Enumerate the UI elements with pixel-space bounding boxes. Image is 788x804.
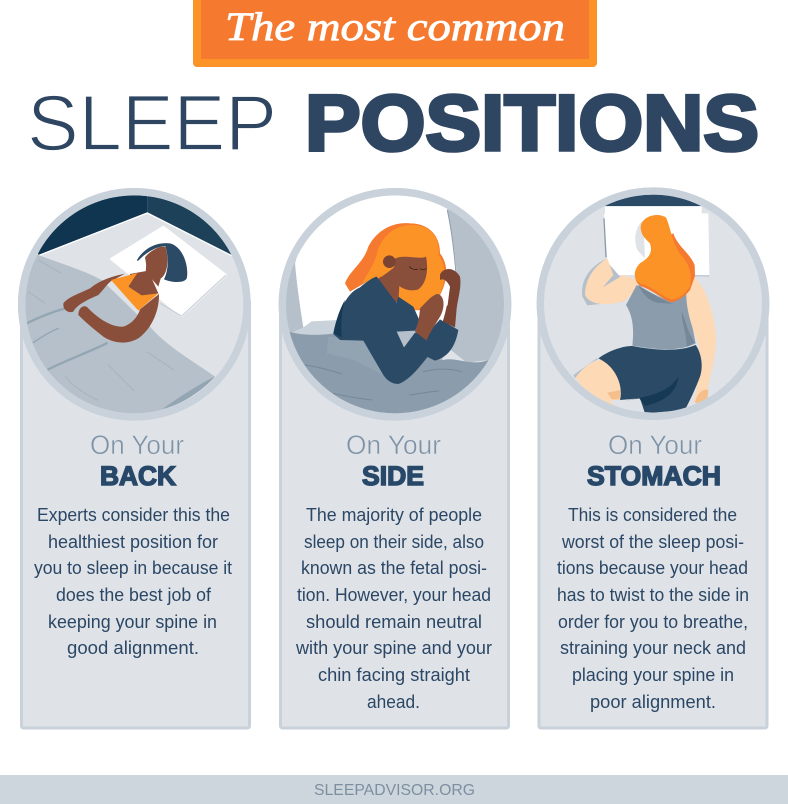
heading: BACK xyxy=(100,461,176,491)
heading: On Your xyxy=(608,430,702,460)
near arm xyxy=(585,258,637,304)
description: order for you to breathe, xyxy=(558,612,748,632)
tank top xyxy=(626,285,696,349)
banner text: The most common xyxy=(225,4,565,49)
shorts xyxy=(598,345,702,413)
illustration: sleeping on stomach xyxy=(540,191,766,416)
heading: STOMACH xyxy=(587,461,721,491)
clasped hands xyxy=(415,294,444,341)
description: Experts consider this the xyxy=(37,505,230,525)
illustration: sleeping on back xyxy=(10,187,250,423)
panel: on your side xyxy=(280,192,508,728)
description: ahead. xyxy=(367,692,420,712)
title: POSITIONS xyxy=(305,78,759,167)
far arm xyxy=(686,273,716,404)
description: straining your neck and xyxy=(560,638,746,658)
footer source text: SLEEPADVISOR.ORG xyxy=(314,782,475,799)
description: worst of the sleep posi- xyxy=(561,532,744,552)
description: poor alignment. xyxy=(590,692,716,712)
heading xyxy=(587,430,721,491)
description: should remain neutral xyxy=(306,612,482,632)
leg xyxy=(575,360,621,408)
hair xyxy=(635,233,695,302)
description: The majority of people xyxy=(306,505,482,525)
panel: on your stomach xyxy=(539,191,767,728)
description: keeping your spine in xyxy=(48,612,217,632)
heading xyxy=(346,430,441,491)
title xyxy=(27,78,759,167)
skin: torso and arms xyxy=(128,271,158,297)
title: SLEEP xyxy=(27,78,277,167)
hair xyxy=(345,223,446,310)
far hand and sleeve xyxy=(440,269,460,327)
heading: On Your xyxy=(90,430,184,460)
description: healthiest position for xyxy=(48,532,218,552)
heading: On Your xyxy=(346,430,441,460)
description: chin facing straight xyxy=(318,665,470,685)
description: does the best job of xyxy=(56,585,212,605)
description xyxy=(34,505,232,658)
description: has to twist to the side in xyxy=(557,585,749,605)
description: placing your spine in xyxy=(572,665,734,685)
banner: the most common xyxy=(193,0,597,67)
description: sleep on their side, also xyxy=(304,532,484,552)
description: tion. However, your head xyxy=(297,585,491,605)
heading xyxy=(90,430,184,491)
description: you to sleep in because it xyxy=(34,558,232,578)
sweater xyxy=(333,277,432,384)
heading: SIDE xyxy=(362,461,424,491)
illustration: sleeping on side xyxy=(282,192,508,423)
panel: on your back xyxy=(10,187,250,728)
footer xyxy=(0,775,788,804)
description xyxy=(557,505,749,712)
description: with your spine and your xyxy=(295,638,492,658)
description xyxy=(295,505,492,712)
description: tions because your head xyxy=(557,558,748,578)
description: good alignment. xyxy=(67,638,199,658)
description: This is considered the xyxy=(568,505,737,525)
description: known as the fetal posi- xyxy=(301,558,487,578)
